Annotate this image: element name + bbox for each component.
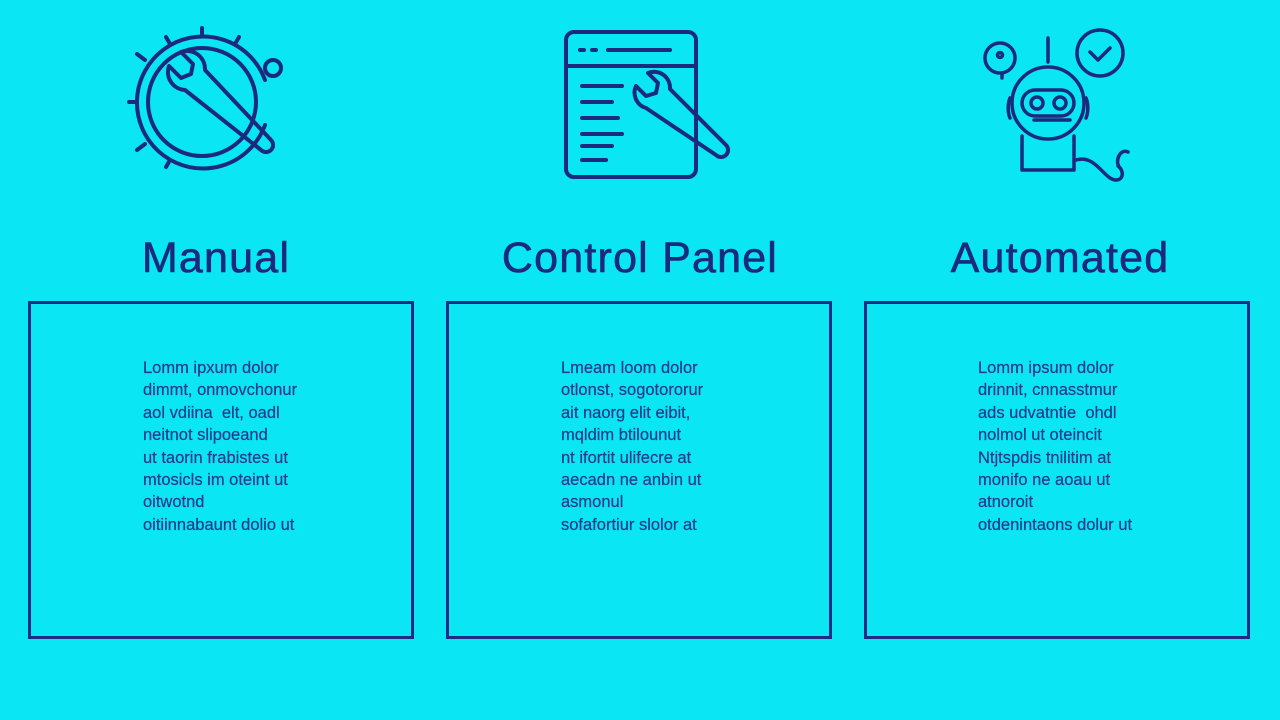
panel: manual [28,301,414,639]
icon: gear with wrench [127,26,283,170]
text: control panel: Lmeam loom dolor otlonst, sogotororur ait naorg elit eibit, mqldim btilounut nt ifortit ulifecre at aecadn ne anbin ut asmonul sofafortiur slolor at [561,359,703,534]
title: Automated: Automated [951,234,1169,282]
panel: control panel [446,301,832,639]
text: manual: Lomm ipxum dolor dimmt, onmovchonur aol vdiina elt, oadl neitnot slipoeand ut taorin frabistes ut mtosicls im oteint ut oitwotnd oitiinnabaunt dolio ut [143,359,297,534]
icon: window with wrench [564,30,730,179]
panel: automated [864,301,1250,639]
text: automated: Lomm ipsum dolor drinnit, cnnasstmur ads udvatntie ohdl nolmol ut oteincit Ntjtspdis tnilitim at monifo ne aoau ut atnoroit otdenintaons dolur ut [978,359,1132,534]
title: Manual: Manual [142,234,290,282]
title: Control Panel: Control Panel [502,234,778,282]
icon: robot [983,28,1130,182]
